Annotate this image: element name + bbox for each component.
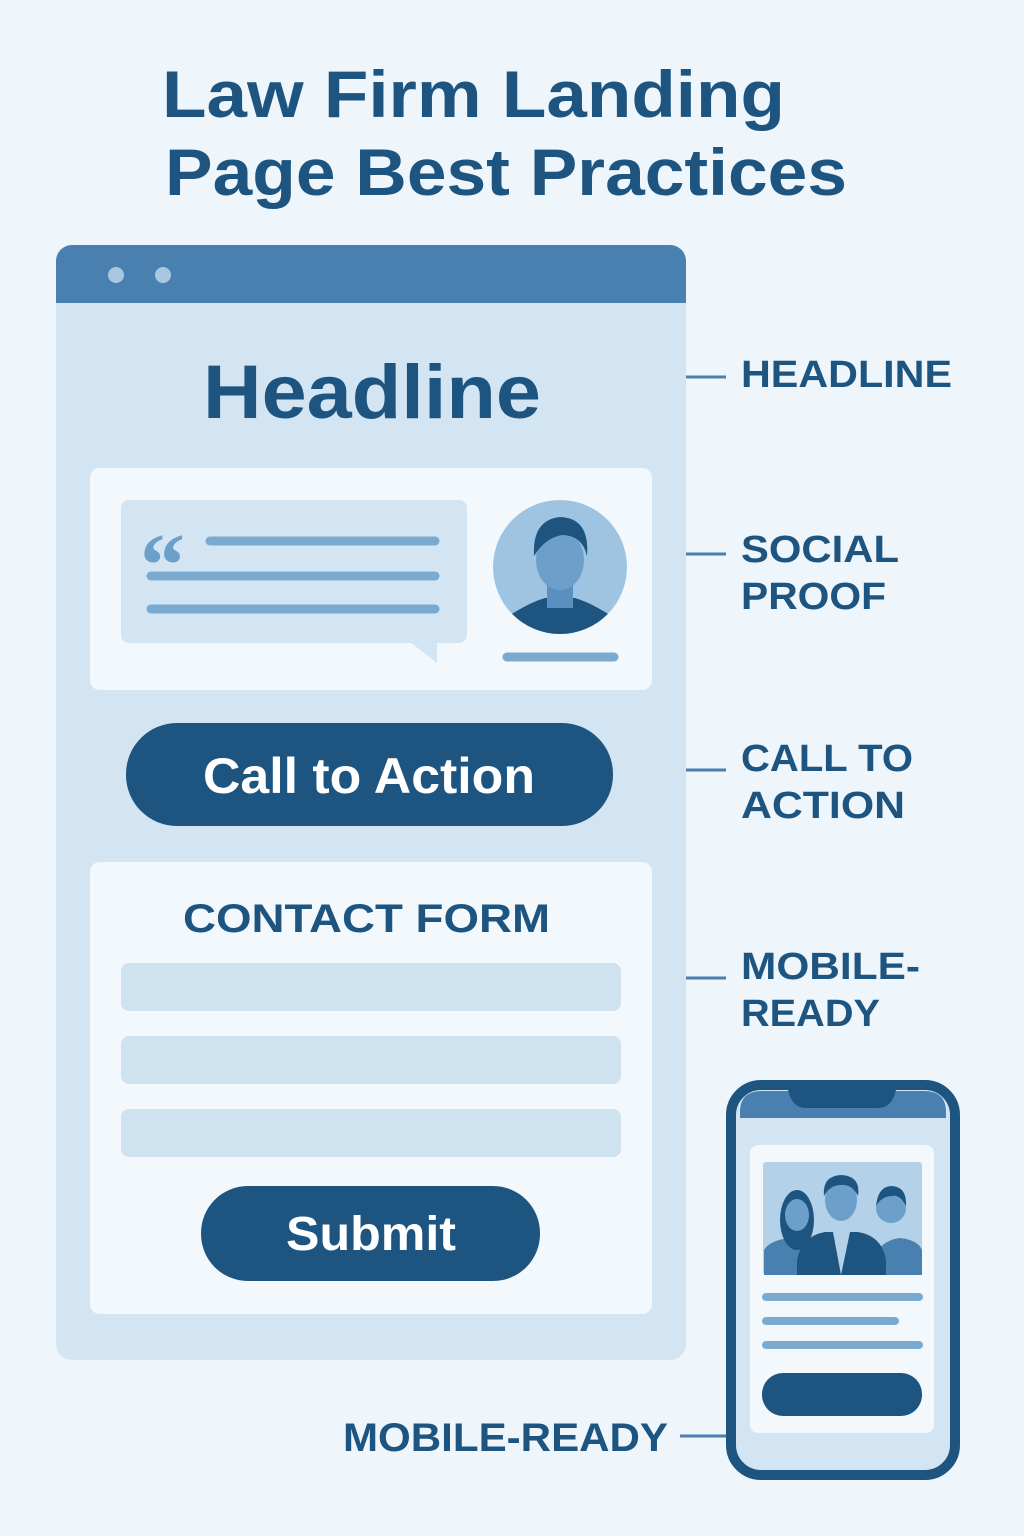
panel: contact form xyxy=(90,862,652,1314)
headline text: Headline xyxy=(203,350,541,435)
icon: avatar xyxy=(493,500,627,662)
labels: side callouts: MOBILE- xyxy=(741,946,920,988)
labels: side callouts: READY xyxy=(741,993,880,1035)
labels: side callouts: MOBILE-READY xyxy=(343,1416,668,1460)
panel: browser mockup xyxy=(56,245,686,1360)
icon: mobile phone xyxy=(731,1085,955,1475)
labels: side callouts: CALL TO xyxy=(741,738,913,780)
submit button xyxy=(201,1186,540,1281)
labels: side callouts: HEADLINE xyxy=(741,354,952,396)
speech bubble xyxy=(121,500,467,663)
title xyxy=(162,57,847,209)
call to action button xyxy=(126,723,613,826)
title: Page Best Practices xyxy=(165,135,847,209)
labels: side callouts: SOCIAL xyxy=(741,529,899,571)
panel: social proof testimonial xyxy=(90,468,652,690)
team photo xyxy=(763,1162,922,1275)
call to action button: Call to Action xyxy=(203,748,535,804)
title: Law Firm Landing xyxy=(162,57,785,131)
browser top bar xyxy=(56,245,686,303)
speech bubble: “ xyxy=(140,516,185,615)
panel: contact form: CONTACT FORM xyxy=(183,897,550,941)
labels: side callouts: PROOF xyxy=(741,576,886,618)
labels: side callouts: ACTION xyxy=(741,785,905,827)
labels: side callouts xyxy=(343,354,952,1460)
submit button: Submit xyxy=(286,1208,456,1261)
